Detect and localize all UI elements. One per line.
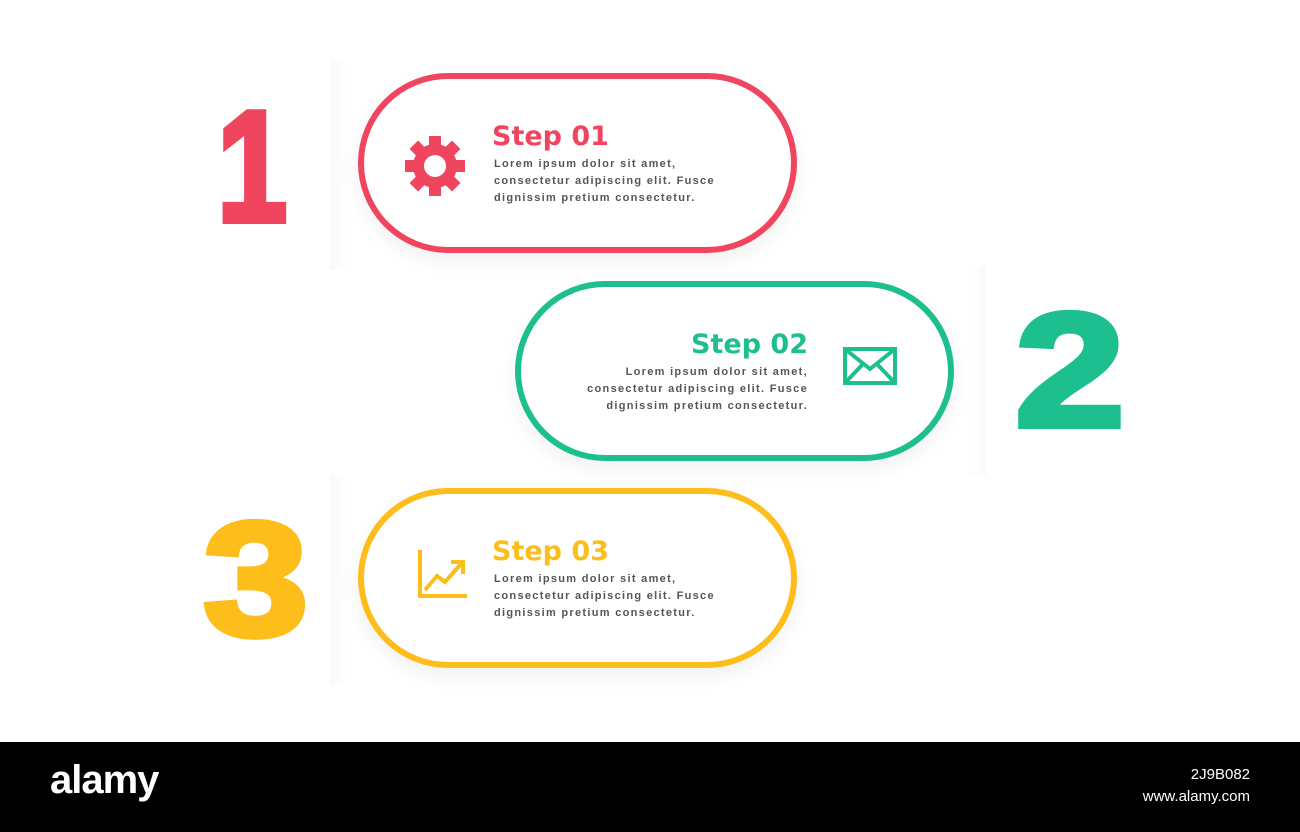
icon: chart	[418, 550, 467, 598]
image id: 2J9B082	[1191, 766, 1250, 783]
text: consectetur adipiscing elit. Fusce	[587, 383, 808, 395]
panel: step 02	[515, 281, 954, 461]
footer bar	[0, 742, 1300, 832]
image id	[1142, 766, 1250, 805]
icon: envelope	[843, 347, 897, 385]
text: consectetur adipiscing elit. Fusce	[494, 590, 715, 602]
image id: www.alamy.com	[1143, 788, 1250, 805]
text: dignissim pretium consectetur.	[494, 607, 696, 619]
text	[494, 573, 715, 619]
text	[587, 366, 808, 412]
text: Lorem ipsum dolor sit amet,	[494, 573, 676, 585]
heading: Step 03	[492, 536, 609, 567]
text: Lorem ipsum dolor sit amet,	[626, 366, 808, 378]
icon: gear	[405, 136, 465, 196]
heading: Step 02	[691, 329, 808, 360]
number 3: 3	[203, 489, 308, 670]
number 1: 1	[217, 79, 287, 255]
text: Lorem ipsum dolor sit amet,	[494, 158, 676, 170]
text: dignissim pretium consectetur.	[606, 400, 808, 412]
panel: step 03	[358, 488, 797, 668]
text	[494, 158, 715, 204]
number 2: 2	[1015, 280, 1125, 461]
heading: Step 01	[492, 121, 609, 152]
panel: step 01	[358, 73, 797, 253]
logo: alamy	[50, 758, 158, 802]
text: dignissim pretium consectetur.	[494, 192, 696, 204]
text: consectetur adipiscing elit. Fusce	[494, 175, 715, 187]
